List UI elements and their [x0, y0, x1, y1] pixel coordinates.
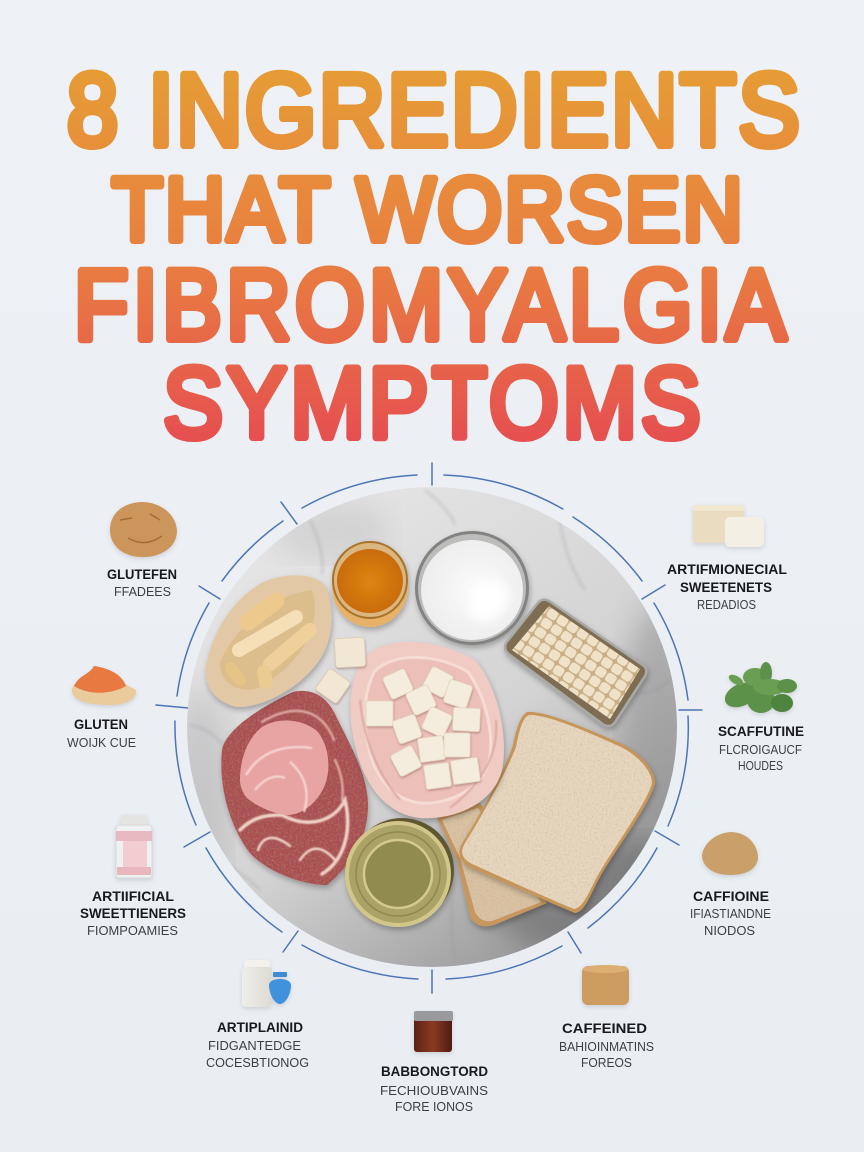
item: gluten foods, top left	[107, 502, 177, 599]
label: artificial sweeteners: SWEETTIENERS	[80, 906, 186, 921]
label: gluten: WOIJK CUE	[67, 736, 136, 750]
front bread slice	[459, 712, 655, 913]
label: scaffutine: SCAFFUTINE	[718, 724, 804, 739]
item: caffeined, bottom right	[559, 965, 654, 1070]
label: artificial sweeteners: ARTIIFICIAL	[92, 889, 174, 904]
label: caffeined: FOREOS	[581, 1056, 632, 1070]
label: babbongtord: BABBONGTORD	[381, 1064, 488, 1079]
label: artificial sweeteners	[80, 889, 186, 938]
label: artificial sweeteners: FIOMPOAMIES	[87, 924, 178, 938]
two loose cubes	[315, 637, 366, 704]
label: gluten foods	[107, 567, 177, 599]
back bread slice	[437, 803, 547, 926]
central marble plate of trigger foods	[187, 487, 677, 967]
icon: cork cylinder	[582, 965, 629, 1005]
label: artificial sweeteners: SWEETENETS	[680, 580, 772, 595]
white powder tin	[415, 531, 529, 645]
tofu cubes	[366, 666, 481, 790]
item: artiplainid, bottom left	[206, 960, 309, 1070]
label: gluten	[67, 717, 136, 750]
pink meat with tofu cubes	[351, 642, 504, 818]
icon: cookie	[110, 502, 177, 557]
item: scaffutine, right	[718, 662, 804, 773]
icon: green leaves	[721, 662, 797, 713]
icon: walnut ball	[702, 832, 758, 875]
icon: cream cubes	[693, 505, 764, 547]
label: gluten foods: FFADEES	[114, 585, 171, 599]
label: artiplainid	[206, 1020, 309, 1070]
label: gluten foods: GLUTEFEN	[107, 567, 177, 582]
label: artificial sweeteners: REDADIOS	[697, 598, 756, 612]
pink ham slice	[240, 721, 328, 815]
label: babbongtord	[380, 1064, 488, 1114]
label: scaffutine: FLCROIGAUCF	[719, 743, 802, 757]
item: gluten, left	[67, 666, 136, 750]
title: 8 INGREDIENTS	[67, 52, 800, 167]
marble plate	[187, 487, 677, 967]
title: FIBROMYALGIA	[74, 250, 786, 360]
item: artificial sweeteners, top right	[667, 505, 787, 612]
title: SYMPTOMS	[163, 348, 700, 458]
label: caffeine	[690, 889, 771, 938]
label: scaffutine: HOUDES	[738, 759, 783, 773]
label: artificial sweeteners: ARTIFMIONECIAL	[667, 562, 787, 577]
gold can	[345, 818, 454, 927]
pink meat base	[351, 642, 504, 818]
label: caffeined	[559, 1021, 654, 1070]
orange honey jar	[332, 542, 408, 627]
label: gluten: GLUTEN	[74, 717, 128, 732]
item: babbongtord, bottom centre	[380, 1011, 488, 1114]
label: babbongtord: FORE IONOS	[395, 1100, 473, 1114]
label: caffeine: NIODOS	[704, 924, 755, 938]
infographic canvas	[67, 70, 804, 1111]
label: artificial sweeteners	[667, 562, 787, 612]
icon: white and blue bottles	[242, 960, 291, 1007]
red meat steak	[221, 691, 368, 885]
icon: topped toast	[72, 666, 136, 705]
icon: pink jar	[116, 815, 152, 878]
label: artiplainid: COCESBTIONOG	[206, 1056, 309, 1070]
label: caffeined: CAFFEINED	[562, 1021, 647, 1036]
hoagie bread with sausages	[206, 575, 332, 707]
label: caffeine: IFIASTIANDNE	[690, 907, 771, 921]
item: artificial sweeteners, lower left	[80, 815, 186, 938]
label: scaffutine	[718, 724, 804, 773]
label: artiplainid: ARTIPLAINID	[217, 1020, 303, 1035]
title	[67, 52, 800, 458]
label: babbongtord: FECHIOUBVAINS	[380, 1084, 488, 1098]
title: THAT WORSEN	[112, 160, 743, 260]
label: caffeine: CAFFIOINE	[693, 889, 769, 904]
label: artiplainid: FIDGANTEDGE	[208, 1039, 301, 1053]
tray of cream pieces	[505, 600, 646, 726]
label: caffeined: BAHIOINMATINS	[559, 1040, 654, 1054]
icon: dark jar	[414, 1011, 453, 1052]
ring of arcs and ticks	[156, 463, 702, 993]
item: caffeine, lower right	[690, 832, 771, 938]
